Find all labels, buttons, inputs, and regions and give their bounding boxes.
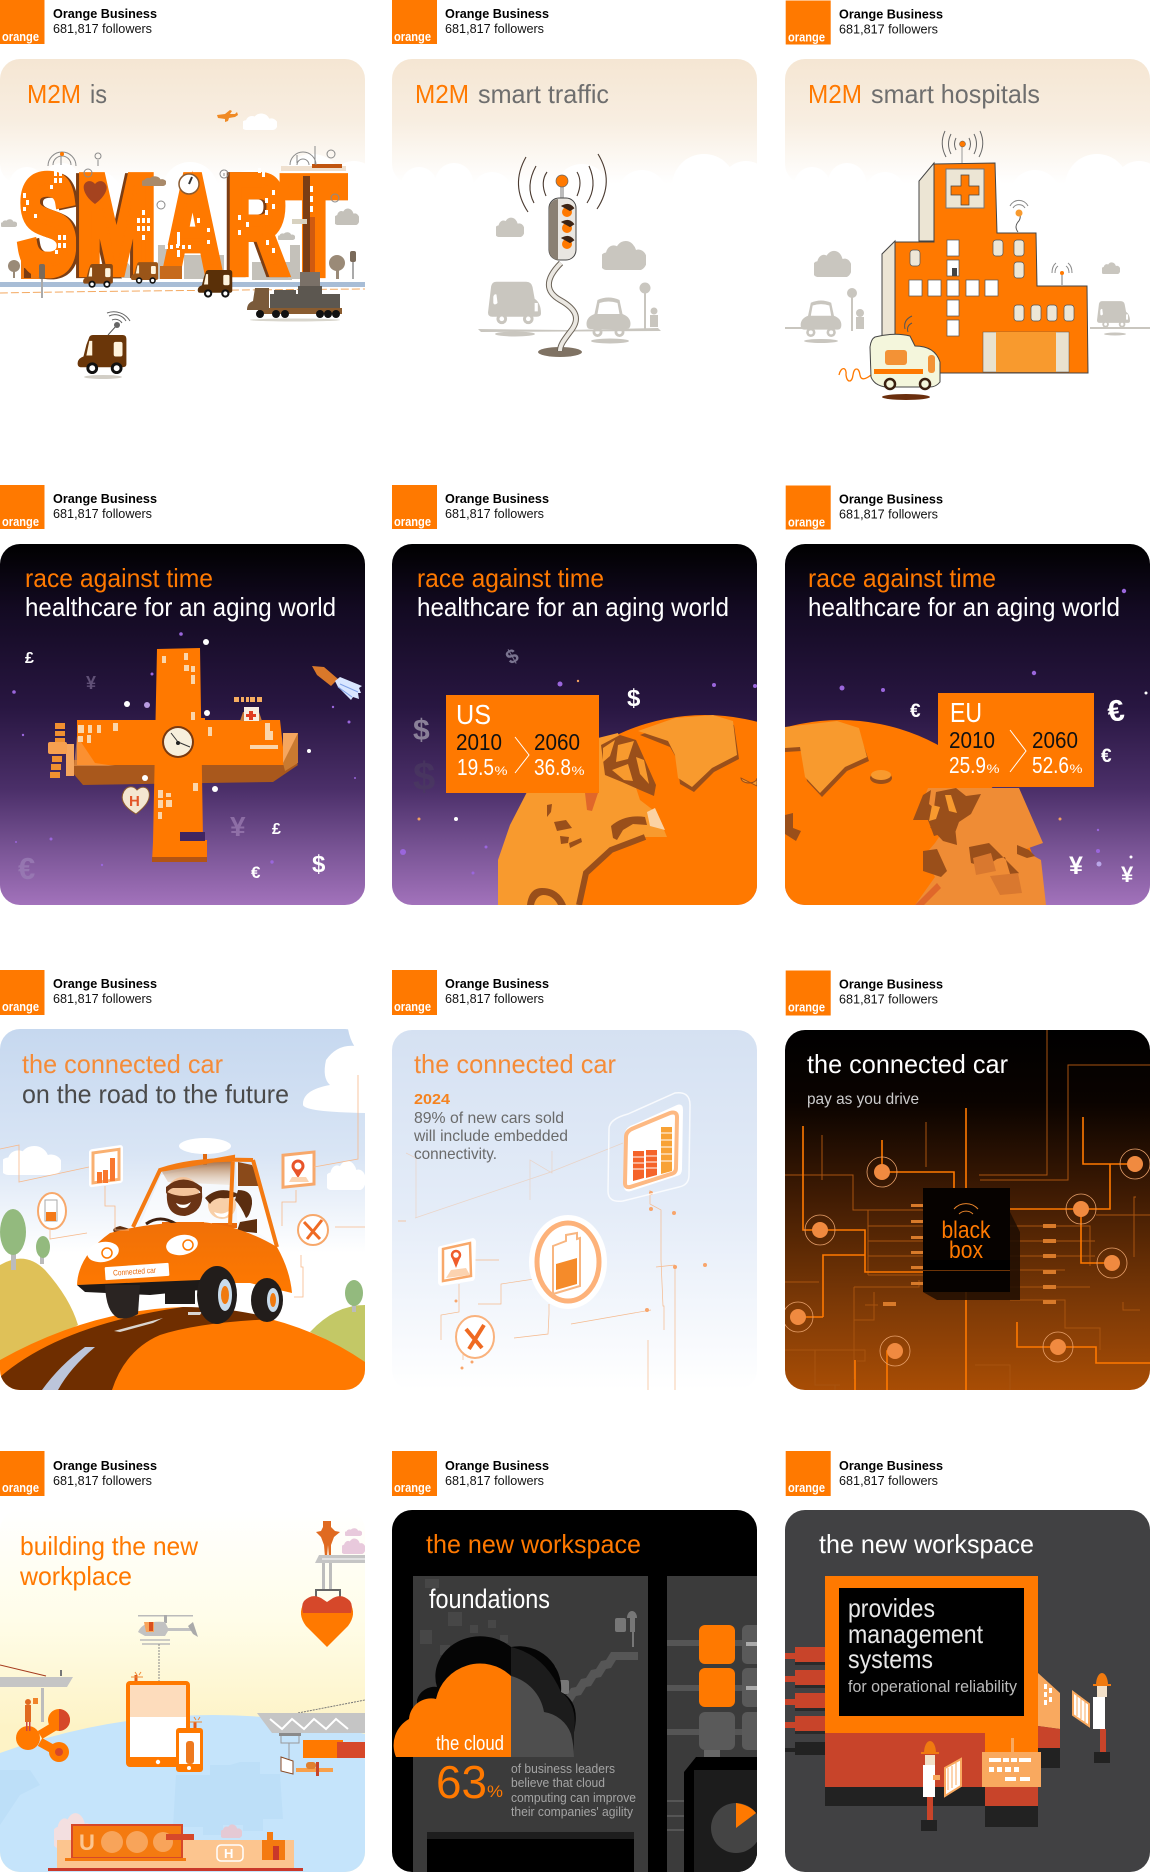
title: race against time bbox=[417, 563, 604, 593]
title: the new workspace bbox=[426, 1529, 641, 1559]
currency symbols: £ bbox=[25, 650, 34, 667]
stars and currency: ¥ bbox=[1069, 852, 1083, 880]
header: Orange Business: 681,817 followers bbox=[445, 21, 544, 36]
letters SMART: R bbox=[225, 148, 283, 300]
letters SMART: R bbox=[228, 148, 286, 300]
header: Orange Business: orange bbox=[394, 999, 431, 1014]
letters SMART: M bbox=[77, 149, 156, 300]
header: Orange Business: 681,817 followers bbox=[839, 22, 938, 36]
header: Orange Business: orange bbox=[2, 999, 39, 1014]
screen text: management bbox=[848, 1619, 984, 1649]
white clouds bbox=[0, 1029, 366, 1190]
icon: battery bbox=[529, 1215, 607, 1309]
data box EU: 25.9 bbox=[949, 752, 986, 778]
data box US: % bbox=[572, 764, 585, 778]
panel: building the new workplace bbox=[0, 1451, 365, 1872]
header: Orange Business: Orange Business bbox=[839, 492, 943, 506]
pie chart bbox=[711, 1803, 761, 1853]
title: on the road to the future bbox=[22, 1079, 289, 1109]
connector dots bbox=[454, 1191, 707, 1370]
plugs bbox=[785, 1647, 825, 1755]
data box US: 19.5 bbox=[457, 754, 494, 780]
stars and currency: $ bbox=[627, 685, 641, 712]
letters SMART: T bbox=[283, 151, 345, 301]
helicopter bbox=[138, 1615, 198, 1682]
header: Orange Business: orange bbox=[394, 29, 431, 44]
currency symbols: $ bbox=[312, 851, 326, 878]
hospital cross building bbox=[48, 648, 298, 862]
header: Orange Business: 681,817 followers bbox=[445, 991, 544, 1006]
connector lines bbox=[398, 1143, 675, 1390]
letters SMART: M bbox=[74, 150, 153, 301]
small building and trees bbox=[8, 255, 345, 279]
right truss and container bbox=[257, 1700, 365, 1776]
statistic 63%: believe that cloud bbox=[511, 1775, 605, 1790]
statistic text: connectivity. bbox=[414, 1146, 497, 1163]
header: Orange Business: Orange Business bbox=[53, 1458, 157, 1473]
cloud: the cloud bbox=[436, 1733, 504, 1755]
currency symbols: € bbox=[18, 851, 35, 886]
header: Orange Business: orange bbox=[788, 1480, 825, 1495]
title: pay as you drive bbox=[807, 1091, 919, 1108]
ambulance bbox=[839, 316, 940, 400]
header: Orange Business: 681,817 followers bbox=[53, 991, 152, 1006]
letters SMART bbox=[19, 148, 345, 301]
header: Orange Business bbox=[786, 0, 943, 44]
header: Orange Business: Orange Business bbox=[839, 976, 943, 992]
header: Orange Business bbox=[786, 970, 943, 1016]
worker right bbox=[1073, 1673, 1111, 1763]
title: building the new bbox=[20, 1531, 198, 1561]
stars and currency: $ bbox=[413, 714, 430, 747]
data box EU: 2060 bbox=[1032, 727, 1078, 753]
title bbox=[417, 563, 729, 622]
title: M2M bbox=[808, 79, 862, 109]
bottom facility: U bbox=[79, 1830, 95, 1855]
heading: foundations: foundations bbox=[429, 1584, 550, 1614]
title: is bbox=[90, 79, 107, 109]
machine body bbox=[825, 1576, 1060, 1827]
staircase bbox=[566, 1652, 638, 1702]
header: Orange Business: orange bbox=[2, 29, 39, 44]
title: smart hospitals bbox=[871, 79, 1040, 109]
bottom facility: H bbox=[224, 1846, 233, 1861]
statistic 63%: % bbox=[487, 1782, 503, 1801]
header: Orange Business: 681,817 followers bbox=[839, 992, 938, 1006]
cloud bbox=[394, 1636, 576, 1757]
icon: wrench bbox=[456, 1316, 494, 1358]
statistic text: will include embedded bbox=[413, 1128, 568, 1145]
statistic text: 89% of new cars sold bbox=[414, 1110, 564, 1127]
currency symbols bbox=[18, 650, 326, 886]
statistic text: 2024 bbox=[414, 1091, 451, 1108]
car with two passengers: Connected car bbox=[113, 1266, 157, 1278]
icon: map pin bbox=[438, 1238, 476, 1286]
worker upper bbox=[615, 1611, 637, 1647]
header: Orange Business: Orange Business bbox=[53, 491, 157, 506]
screen text: for operational reliability bbox=[848, 1677, 1017, 1696]
header: Orange Business: orange bbox=[2, 1480, 39, 1495]
header: Orange Business: Orange Business bbox=[53, 976, 157, 991]
left truss and share icon bbox=[0, 1665, 73, 1762]
data box US: US bbox=[456, 699, 491, 730]
stars and currency: ¥ bbox=[1121, 862, 1134, 887]
header: Orange Business: 681,817 followers bbox=[445, 1473, 544, 1488]
panel: race against time, EU bbox=[785, 486, 1150, 905]
title bbox=[22, 1049, 289, 1109]
heart sign bbox=[122, 787, 149, 814]
worker, truss and heart bbox=[301, 1521, 365, 1647]
tablet and phone bbox=[126, 1672, 203, 1772]
header: Orange Business bbox=[392, 0, 549, 44]
title: workplace bbox=[19, 1561, 132, 1591]
stars and currency: € bbox=[1105, 694, 1127, 729]
statistic 63%: their companies' agility bbox=[511, 1804, 633, 1819]
worker left bbox=[921, 1741, 961, 1831]
title: M2M bbox=[415, 79, 469, 109]
stars and currency bbox=[400, 645, 757, 874]
header: Orange Business: 681,817 followers bbox=[445, 506, 544, 521]
header: Orange Business bbox=[786, 1451, 943, 1496]
letters SMART: S bbox=[22, 150, 79, 301]
header: Orange Business bbox=[0, 485, 157, 529]
data box US: 2010 bbox=[456, 729, 502, 755]
data box US: % bbox=[494, 764, 508, 778]
data box EU: % bbox=[1070, 762, 1083, 776]
background clouds bbox=[794, 154, 1150, 220]
right column modules bbox=[667, 1576, 762, 1872]
statistic 63%: of business leaders bbox=[511, 1761, 615, 1776]
title: healthcare for an aging world bbox=[808, 592, 1120, 622]
icon: battery bbox=[38, 1193, 66, 1229]
header: Orange Business: orange bbox=[788, 30, 825, 44]
icon: wrench bbox=[298, 1215, 328, 1245]
black box: black bbox=[942, 1217, 991, 1244]
antenna nodes bbox=[124, 639, 311, 792]
screen text: provides bbox=[848, 1593, 935, 1623]
header: Orange Business: Orange Business bbox=[445, 1458, 549, 1473]
stars and currency: $ bbox=[413, 755, 435, 799]
panel: race against time, hospital cross bbox=[0, 485, 365, 905]
currency symbols: € bbox=[251, 863, 261, 882]
data box EU: EU bbox=[950, 697, 982, 728]
worker lower bbox=[554, 1666, 569, 1694]
header: Orange Business bbox=[786, 486, 943, 530]
title: race against time bbox=[808, 563, 996, 593]
stars and currency bbox=[840, 589, 1148, 887]
stars bbox=[12, 632, 356, 866]
header: Orange Business: orange bbox=[788, 514, 825, 530]
statistic text bbox=[413, 1091, 568, 1163]
header: Orange Business: 681,817 followers bbox=[53, 21, 152, 36]
data box EU: 2010 bbox=[949, 727, 995, 753]
black box: box bbox=[949, 1237, 983, 1264]
vehicles on road bbox=[83, 262, 342, 322]
header: Orange Business: Orange Business bbox=[445, 491, 549, 506]
bottom facility bbox=[48, 1813, 303, 1871]
header: Orange Business: orange bbox=[394, 514, 431, 529]
title: the new workspace bbox=[819, 1529, 1034, 1559]
header: Orange Business: 681,817 followers bbox=[53, 506, 152, 521]
panel: new workspace, management systems bbox=[785, 1451, 1150, 1872]
statistic 63%: 63 bbox=[436, 1756, 487, 1808]
data box US: 2060 bbox=[534, 729, 580, 755]
panel: M2M smart traffic bbox=[392, 0, 771, 357]
header: Orange Business: Orange Business bbox=[839, 6, 943, 22]
header: Orange Business: Orange Business bbox=[53, 6, 157, 21]
header: Orange Business bbox=[0, 1451, 157, 1496]
letters SMART: S bbox=[19, 149, 76, 300]
header: Orange Business: orange bbox=[2, 514, 39, 529]
data box EU bbox=[938, 693, 1094, 787]
traffic light with cable bbox=[518, 154, 606, 357]
letter details: heart, clock, windows bbox=[23, 164, 346, 279]
icon: chart bbox=[89, 1145, 123, 1187]
data box US: 36.8 bbox=[534, 754, 571, 780]
hills and trees bbox=[0, 1209, 365, 1390]
road bbox=[0, 251, 365, 298]
title: M2M bbox=[27, 79, 81, 109]
panel: connected car, on the road bbox=[0, 970, 366, 1390]
panel: new workspace, foundations bbox=[392, 1451, 762, 1872]
title bbox=[25, 563, 336, 622]
title bbox=[19, 1531, 198, 1591]
background clouds bbox=[9, 154, 379, 220]
heart sign: H bbox=[129, 793, 140, 810]
icon: chart bbox=[608, 1093, 690, 1201]
stars and currency: $ bbox=[502, 645, 523, 669]
currency symbols: £ bbox=[272, 821, 281, 838]
header: Orange Business bbox=[392, 485, 549, 529]
panel: race against time, US bbox=[392, 485, 757, 905]
letters SMART: A bbox=[164, 150, 221, 300]
header: Orange Business: orange bbox=[394, 1480, 431, 1495]
currency symbols: ¥ bbox=[86, 673, 96, 693]
title: smart traffic bbox=[478, 79, 609, 109]
data box EU: % bbox=[986, 762, 1000, 776]
screen text bbox=[839, 1588, 1024, 1716]
globe with Europe bbox=[785, 720, 1046, 905]
header: Orange Business bbox=[0, 0, 157, 44]
black box bbox=[923, 1188, 1020, 1300]
connector lines bbox=[0, 1075, 365, 1297]
statistic 63%: computing can improve bbox=[511, 1790, 636, 1805]
header: Orange Business bbox=[392, 1451, 549, 1496]
header: Orange Business bbox=[0, 970, 157, 1015]
globe with Americas bbox=[498, 715, 757, 905]
stars and currency: € bbox=[910, 701, 921, 722]
title: race against time bbox=[25, 563, 213, 593]
panel: connected car, 2024 statistic bbox=[392, 970, 757, 1390]
header: Orange Business: 681,817 followers bbox=[839, 1473, 938, 1488]
rocket bbox=[312, 666, 362, 700]
icon: map pin bbox=[283, 1152, 314, 1187]
background clouds bbox=[401, 154, 771, 220]
globe bbox=[0, 1715, 365, 1872]
grey background traffic bbox=[785, 251, 1150, 343]
hospital building bbox=[882, 131, 1088, 373]
circuit nodes bbox=[783, 1149, 1150, 1366]
header: Orange Business: 681,817 followers bbox=[53, 1473, 152, 1488]
plane and cloud bbox=[217, 110, 278, 130]
title: the connected car bbox=[414, 1049, 616, 1079]
skyline bbox=[0, 209, 359, 280]
stars and currency: € bbox=[1101, 746, 1112, 767]
header: Orange Business: orange bbox=[788, 1000, 825, 1014]
title bbox=[808, 563, 1120, 622]
data box US bbox=[446, 695, 599, 793]
currency symbols: ¥ bbox=[230, 811, 246, 842]
header: Orange Business: Orange Business bbox=[445, 6, 549, 21]
car with two passengers bbox=[77, 1138, 292, 1324]
title bbox=[415, 79, 609, 109]
screen text: systems bbox=[848, 1644, 933, 1674]
title: healthcare for an aging world bbox=[25, 592, 336, 622]
header: Orange Business: 681,817 followers bbox=[839, 506, 938, 522]
pixel texture bbox=[420, 1579, 508, 1655]
header: Orange Business: Orange Business bbox=[839, 1458, 943, 1473]
title: the connected car bbox=[22, 1049, 223, 1079]
title: healthcare for an aging world bbox=[417, 592, 729, 622]
circuit lines bbox=[783, 1030, 1150, 1390]
panel: M2M is smart bbox=[0, 0, 379, 379]
header: Orange Business: Orange Business bbox=[445, 976, 549, 991]
van with antenna bbox=[78, 312, 130, 379]
data box EU: 52.6 bbox=[1032, 752, 1069, 778]
title: the connected car bbox=[807, 1049, 1008, 1079]
grey column foundations bbox=[394, 1576, 648, 1872]
statistic 63% bbox=[436, 1756, 636, 1819]
panel: connected car, black box bbox=[783, 970, 1150, 1390]
grey background traffic bbox=[478, 218, 661, 344]
antennas on letters bbox=[48, 146, 339, 209]
panel: M2M smart hospitals bbox=[785, 0, 1150, 400]
title bbox=[807, 1049, 1008, 1108]
header: Orange Business bbox=[392, 970, 549, 1015]
